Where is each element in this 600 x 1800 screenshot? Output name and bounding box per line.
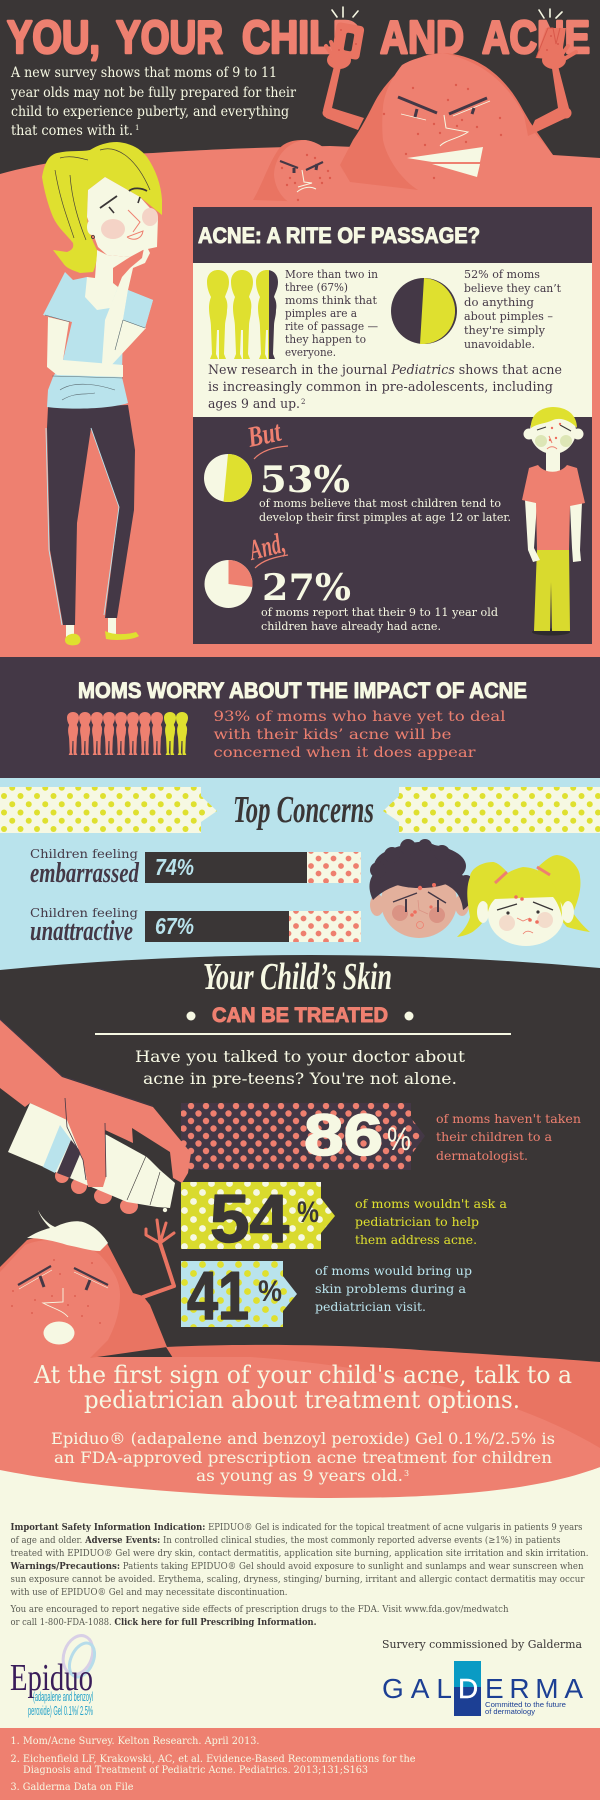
woman shirt [43,272,153,409]
tag: 54 percent [181,1181,335,1257]
tag: 86 percent: 86 [304,1103,383,1168]
footer references: Diagnosis and Treatment of Pediatric Acne. Pediatrics. 2013;131;S163 [23,1764,368,1776]
header background [0,0,600,210]
monster nose [440,115,468,146]
monster hair [27,1210,108,1251]
label: And: And, [245,527,289,567]
tube bands [43,1125,71,1173]
epiduo statement: as young as 9 years old. [196,1467,403,1485]
hand [0,1020,191,1187]
band text: concerned when it does appear [214,745,476,761]
text: 53 percent description: develop their first pimples at age 12 or later. [259,510,511,524]
logo tagline: of dermatology [485,1707,535,1716]
title: YOU, [7,11,100,63]
top concerns heading: Top Concerns [233,789,374,831]
section: top concerns background [0,778,600,978]
monster brows and eyes [398,97,490,120]
finger tips [55,1169,138,1214]
band heading: MOMS WORRY ABOUT THE IMPACT OF ACNE [78,678,527,703]
letters held by monster [331,22,566,60]
logo wordmark: GAL [382,1673,452,1704]
boy pimples [549,423,561,441]
tag: 54 percent: % [297,1196,319,1229]
epiduo statement [51,1430,555,1485]
monster mouth [44,1322,74,1344]
salmon hill background [0,146,600,657]
text: 41 percent: of moms would bring up [315,1263,472,1278]
woman face [87,177,158,257]
concern row: embarrassed [30,847,361,889]
text: two in three: three (67%) [285,281,348,294]
logo descriptor [28,1689,93,1718]
section: dark treatment background [0,955,600,1400]
closing salmon dark wave [166,1345,600,1480]
band text [214,709,506,761]
intro text: A new survey shows that moms of 9 to 11 [10,65,277,81]
title: AND [380,11,464,63]
band background [0,657,600,778]
text: two in three: everyone. [285,346,336,359]
text: two in three [285,268,378,359]
tag: 86 percent: % [387,1121,411,1157]
text: two in three: pimples are a [285,307,357,320]
panel purple body [193,417,592,644]
logo tagline [485,1700,566,1716]
boy ears [524,428,584,440]
panel cream body [193,263,592,417]
heading: your child's skin: Your Child’s Skin [203,956,392,998]
text: 86 percent [436,1111,581,1163]
footer references: 1. Mom/Acne Survey. Kelton Research. April 2013. [10,1735,260,1747]
woman neck and chest [85,250,130,310]
intro text [10,65,296,139]
text: 41 percent: pediatrician visit. [315,1299,426,1314]
text: two in three: More than two in [285,268,378,281]
woman shoes [65,631,139,645]
galderma logo [382,1661,583,1716]
monster arm [143,1220,174,1297]
woman arm to chin [102,243,150,370]
text: 27 percent description: children have already had acne. [261,619,441,633]
text: 41 percent [315,1263,472,1314]
boy hair [531,407,577,428]
woman earring [92,236,94,238]
text: new research: 2 [301,398,305,406]
woman ear [87,219,97,235]
face: curly haired child [369,839,473,938]
safety information: of age and older. Adverse Events: In controlled clinical studies, the most commonly reported adverse events (≥1%) in patients [10,1535,561,1546]
infographic canvas: (adapalene and benzoyl [33,1689,93,1704]
logo rings [58,1631,100,1681]
closing salmon blob [0,1340,600,1498]
monster body [340,53,553,190]
stat 27 percent: 27% [262,567,351,609]
monster body [0,1234,167,1358]
spark marks [332,7,562,18]
panel: acne rite of passage [193,207,592,644]
text: 54 percent: of moms wouldn't ask a [355,1196,508,1211]
text: 52 percent: they're simply [464,324,546,337]
sad pimple monster [0,1210,174,1358]
panel heading: ACNE: A RITE OF PASSAGE? [198,223,480,248]
text: 52 percent: unavoidable. [464,338,535,351]
title: YOUR [116,11,223,63]
monster pimples [11,1259,101,1324]
woman ankles [66,615,116,638]
title [7,11,590,63]
hand holding tube [0,1019,191,1214]
boy with acne [522,407,585,636]
infographic canvas: peroxide) Gel 0.1%/ 2.5% [28,1703,93,1718]
monster brows and eyes [18,1266,108,1290]
epiduo logo [10,1631,100,1718]
logo wordmark: ERMA [485,1673,583,1704]
tag: 54 percent: 54 [210,1181,289,1257]
concern row: unattractive: 67% [155,913,194,939]
call to action heading: At the first sign of your child's acne, talk to a [33,1361,572,1389]
concern row: unattractive: Children feeling [30,906,138,920]
text: new research: ages 9 and up. [208,397,300,412]
text: 53 percent description [259,496,511,524]
intro text: year olds may not be fully prepared for their [10,85,296,101]
pie chart 53 percent [204,454,252,502]
logo wordmark: D [458,1673,478,1704]
woman arm across waist [47,317,123,377]
safety information: You are encouraged to report negative side effects of prescription drugs to the FDA. Visit www.fda.gov/medwatch [10,1604,509,1615]
monster arms and hands [322,42,576,136]
concern row: unattractive [30,906,361,947]
tag: 41 percent: 41 [187,1258,249,1334]
epiduo statement: Epiduo® (adapalene and benzoyl peroxide) Gel 0.1%/2.5% is [51,1430,555,1448]
text: two in three: moms think that [285,294,378,307]
pie chart 27 percent [204,560,252,608]
moms silhouettes 93 percent [67,712,188,755]
logo wordmark [382,1673,583,1704]
intro text: 1 [135,124,139,132]
band: moms worry [0,657,600,778]
call to action heading [33,1361,572,1414]
footer references: 3. Galderma Data on File [10,1781,134,1793]
monster face [382,53,553,190]
tag: 86 percent [181,1103,425,1170]
text: new research: is increasingly common in pre-adolescents, including [208,380,553,395]
monster pimples [383,84,502,179]
text: 52 percent: do anything [464,296,534,309]
boy pants [534,548,570,631]
top concerns banner left [0,787,217,833]
small angry pimple monster [253,140,345,205]
concern row: embarrassed: Children feeling [30,847,138,861]
band text: with their kids’ acne will be [214,727,452,743]
question text: acne in pre-teens? You're not alone. [143,1069,457,1088]
intro text: child to experience puberty, and everything [11,104,289,120]
monster face [0,1240,120,1358]
woman right sleeve [123,290,153,328]
woman cheeks [101,208,158,239]
text: 86 percent: their children to a [436,1129,553,1144]
text: 27 percent description [261,605,499,633]
title: CHILD [242,11,361,63]
woman clothes detail lines [45,315,145,400]
text: 54 percent: pediatrician to help [355,1214,479,1229]
logo square [454,1661,481,1687]
pie chart 52 percent [391,278,457,344]
question text: Have you talked to your doctor about [135,1047,466,1066]
concern row: unattractive: unattractive [30,916,133,947]
text: 86 percent: dermatologist. [436,1148,528,1163]
text: 52 percent [464,268,562,351]
top concerns banner right [383,787,600,833]
text: 53 percent description: of moms believe that most children tend to [259,496,501,510]
boy face features [537,425,571,449]
panel header bar [193,207,592,263]
text: two in three: rite of passage — [285,320,378,333]
monster teeth [407,147,483,177]
call to action heading: pediatrician about treatment options. [84,1386,520,1414]
epiduo statement: 3 [404,1469,409,1478]
question text [135,1047,466,1088]
mom silhouettes 67 percent [207,270,278,359]
text: 41 percent: skin problems during a [315,1281,467,1296]
footer references: 2. Eichenfield LF, Krakowski, AC, et al. Evidence-Based Recommendations for the [10,1753,416,1765]
text: 52 percent: believe they can’t [464,282,562,295]
boy head [530,408,576,454]
text: new research: New research in the journal Pediatrics shows that acne [208,363,562,378]
label: And [245,527,289,568]
woman hair strands [55,149,150,240]
woman legs [47,405,135,625]
text: two in three: they happen to [285,333,366,346]
footer references [0,1728,600,1800]
epiduo statement: an FDA-approved prescription acne treatment for children [54,1449,552,1467]
tube [8,1103,175,1208]
closing cream area [0,1467,600,1728]
tag: 41 percent [181,1258,297,1334]
text: new research [208,363,562,412]
text: 52 percent: about pimples – [464,310,553,323]
text: 54 percent [355,1196,508,1247]
text: 86 percent: of moms haven't taken [436,1111,581,1126]
concern row: embarrassed: 74% [155,854,194,880]
text: 54 percent: them address acne. [355,1232,477,1247]
boy cheeks [535,435,572,447]
safety information: with use of EPIDUO® Gel and may necessitate discontinuation. [10,1587,288,1598]
stat 53 percent: 53% [260,459,350,501]
text: 52 percent: 52% of moms [464,268,540,281]
label: But: But [244,416,284,454]
woman hair [42,142,162,273]
boy neck [546,448,560,472]
monster nose [43,1288,68,1317]
face: blonde pigtail child [457,855,590,946]
band text: 93% of moms who have yet to deal [214,709,506,725]
boy arms [525,500,582,562]
intro text: that comes with it. [11,123,133,139]
logo tagline: Committed to the future [485,1700,566,1709]
safety information: or call 1-800-FDA-1088. Click here for full Prescribing Information. [10,1617,316,1628]
survey credit: Survery commissioned by Galderma [382,1637,582,1651]
big angry pimple monster [322,7,576,190]
tube nozzle [162,1208,168,1212]
woman thinking [42,142,162,645]
heading: can be treated: CAN BE TREATED [212,1004,388,1027]
boy shoes [532,628,570,636]
woman brows, eyes, nose and mouth [100,188,147,239]
text: 27 percent description: of moms report that their 9 to 11 year old [261,605,499,619]
boy shirt [522,465,585,550]
tag: 41 percent: % [258,1275,282,1308]
safety information [10,1522,589,1628]
concern row: embarrassed: embarrassed [30,858,140,889]
logo wordmark: Epiduo [10,1657,93,1699]
